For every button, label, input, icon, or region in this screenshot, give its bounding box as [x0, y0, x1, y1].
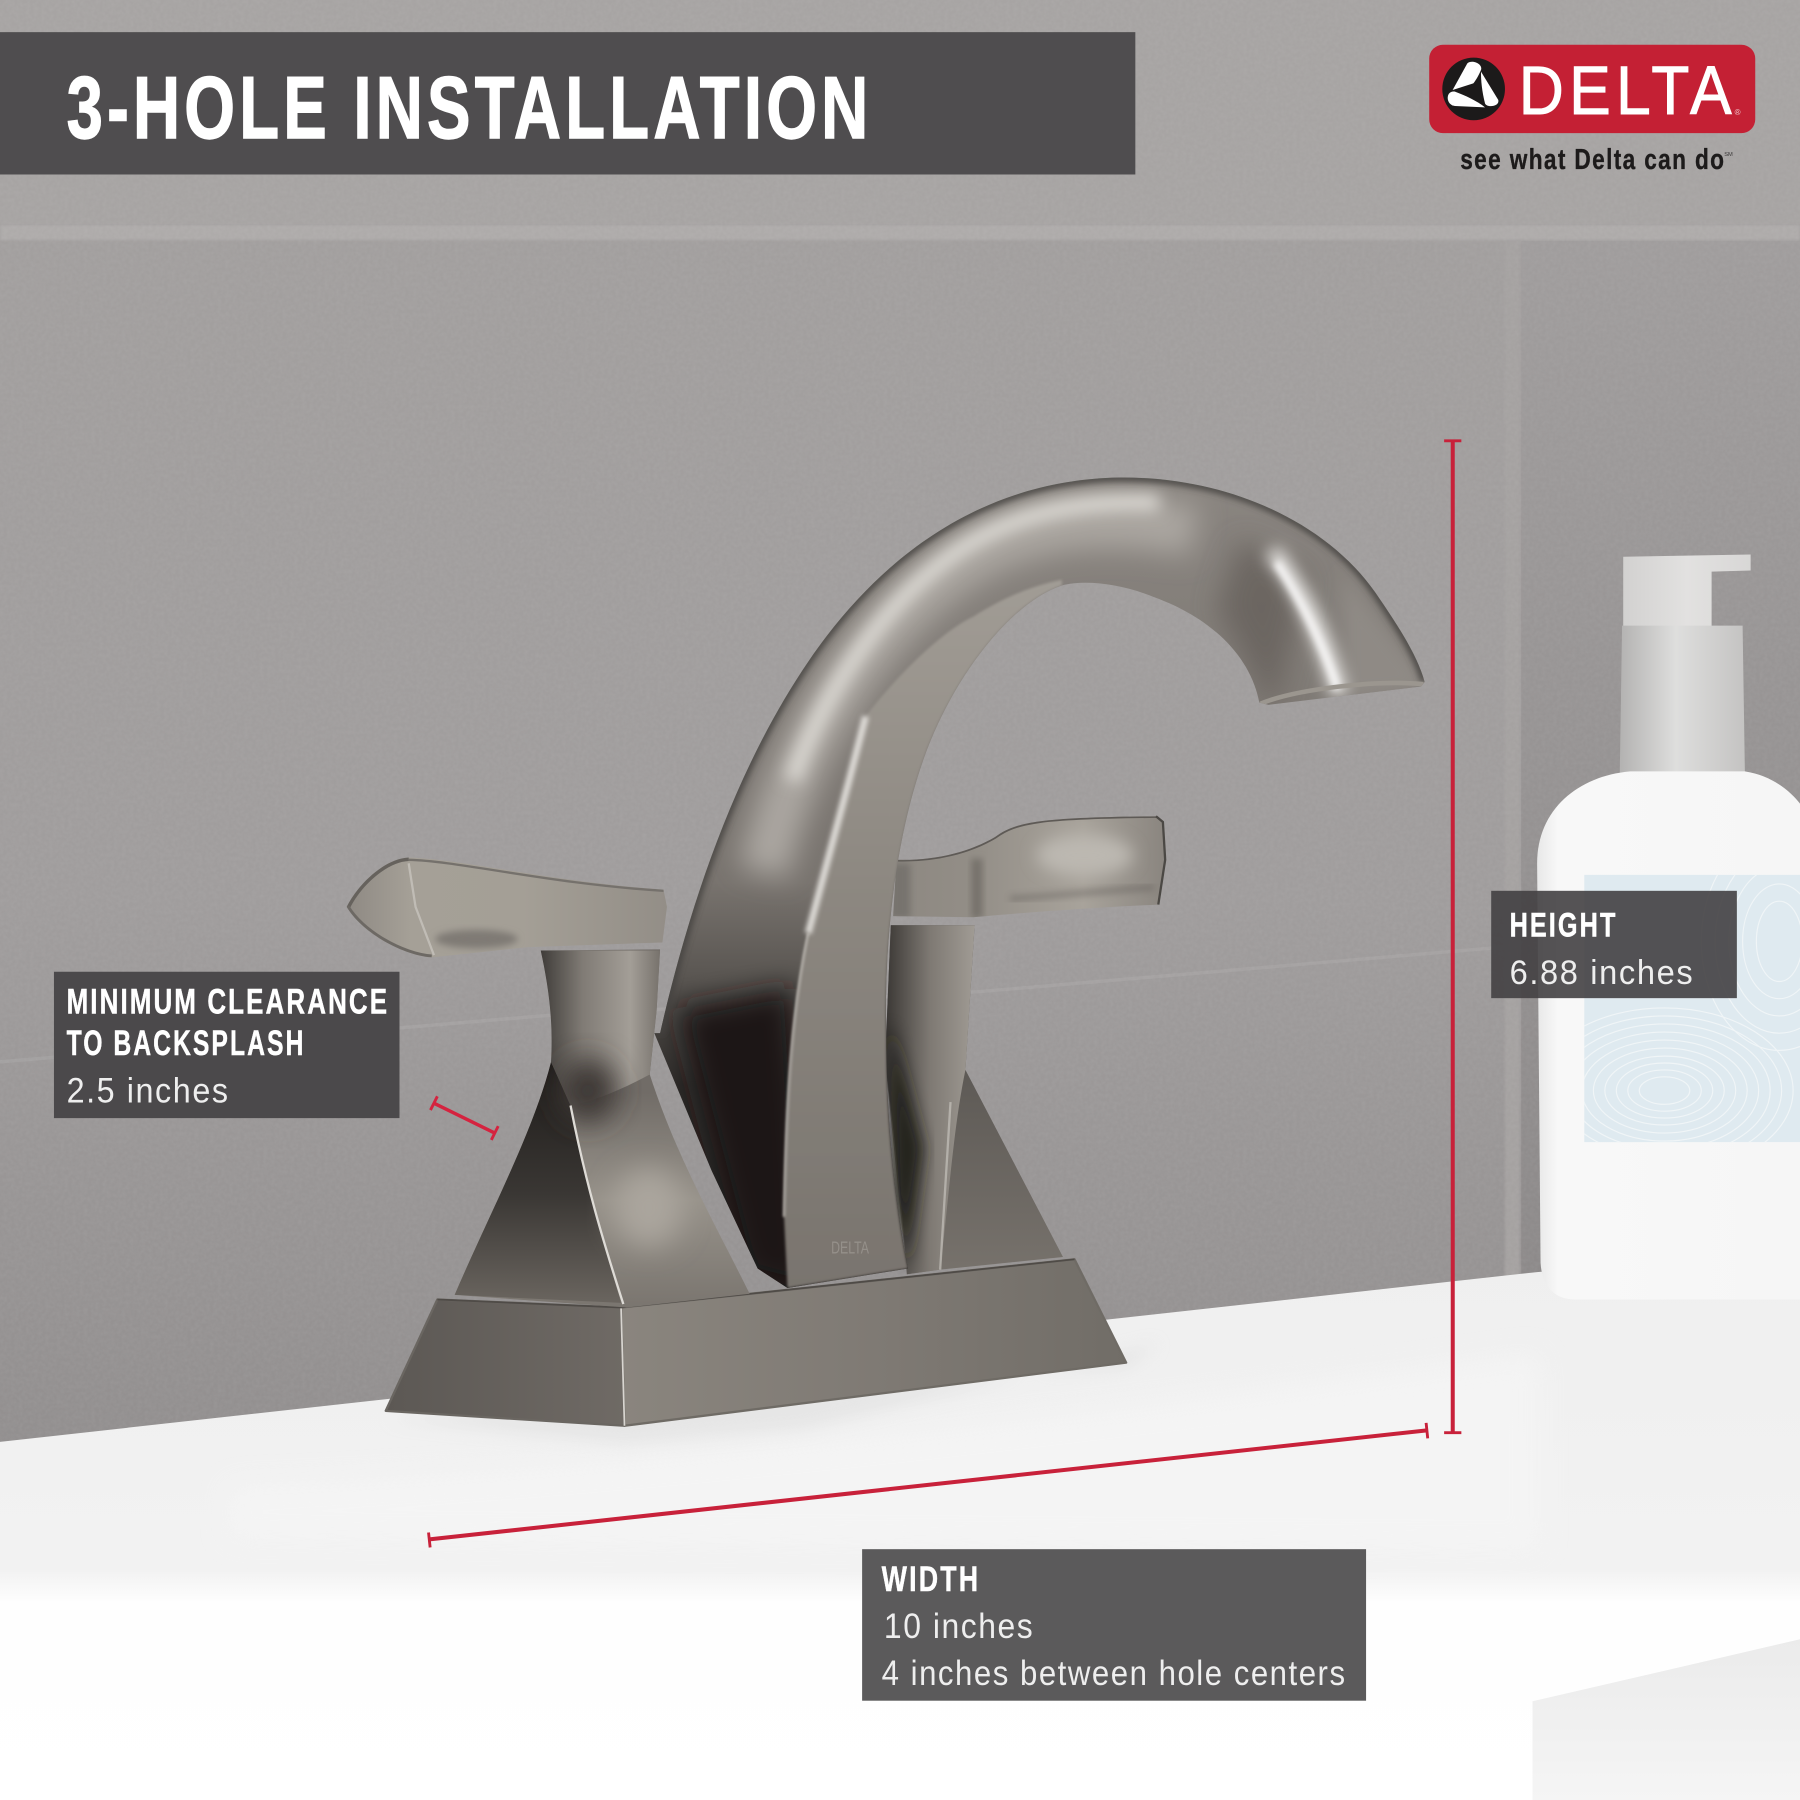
- faucet engraving: DELTA: [831, 1238, 869, 1258]
- white sink countertop: [0, 1254, 1800, 1800]
- right lever handle: [890, 816, 1165, 918]
- logo tagline: see what Delta can do: [1460, 144, 1725, 176]
- dimension line: height: [1444, 441, 1461, 1433]
- callout: width: [862, 1549, 1366, 1701]
- title text: 3-HOLE INSTALLATION: [67, 58, 872, 157]
- callout heading line 1: MINIMUM CLEARANCE: [67, 982, 389, 1022]
- dimension line: width: [429, 1423, 1428, 1547]
- bottle collar: [1620, 626, 1745, 774]
- callout: height: [1491, 891, 1737, 998]
- faucet deck plate: [386, 1259, 1126, 1426]
- bottle body: [1537, 771, 1800, 1299]
- callout value: 2.5 inches: [67, 1071, 230, 1111]
- logo black circle icon: [1442, 58, 1505, 120]
- width value: 10 inches: [884, 1606, 1034, 1646]
- faucet: [347, 478, 1435, 1426]
- callout: minimum clearance: [54, 972, 399, 1118]
- left lever handle: [347, 858, 667, 957]
- left pedestal: [455, 949, 750, 1308]
- bottle pump head: [1623, 554, 1751, 627]
- dimension line: backsplash clearance: [430, 1096, 498, 1140]
- spout: [654, 478, 1435, 1291]
- hole center spacing: 4 inches between hole centers: [882, 1653, 1347, 1693]
- right pedestal: [885, 925, 1063, 1274]
- spout highlight band: [792, 502, 1159, 781]
- height heading: HEIGHT: [1510, 907, 1617, 945]
- spout outer rim: [660, 478, 1425, 1033]
- Delta logo: [1429, 45, 1755, 176]
- registered mark: ®: [1735, 108, 1741, 117]
- callout heading line 2: TO BACKSPLASH: [67, 1023, 305, 1063]
- spout broad sheen: [763, 522, 1194, 872]
- spout front face: [784, 580, 1062, 1288]
- logo red badge: [1429, 45, 1755, 133]
- width heading: WIDTH: [882, 1559, 980, 1599]
- service mark: SM: [1724, 152, 1733, 158]
- spout tip highlight: [1272, 551, 1340, 695]
- title banner: [0, 32, 1135, 174]
- logo wordmark: DELTA: [1519, 52, 1737, 129]
- bottle label: [1584, 875, 1800, 1142]
- soap bottle: [1536, 554, 1800, 1299]
- height value: 6.88 inches: [1510, 954, 1694, 992]
